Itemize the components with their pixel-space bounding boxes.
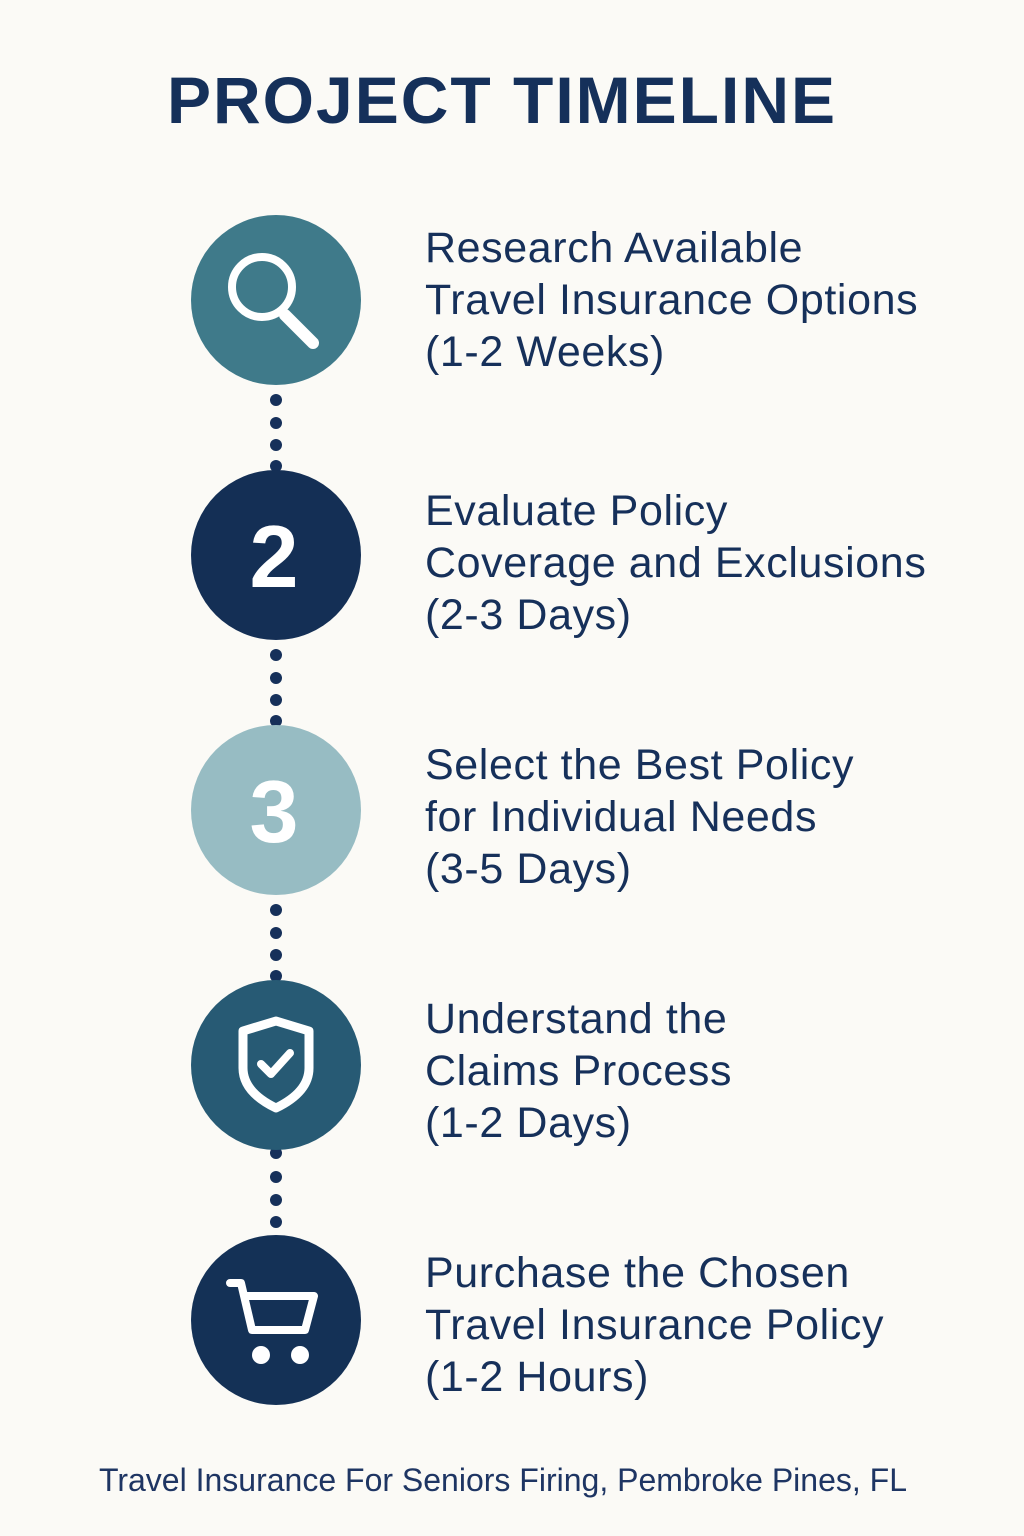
icon: number 2 circle <box>191 470 361 640</box>
step 1 text: Travel Insurance Options <box>425 276 918 324</box>
title: PROJECT TIMELINE <box>167 63 837 137</box>
icon: magnifier circle <box>191 215 361 385</box>
footer: Travel Insurance For Seniors Firing, Pembroke Pines, FL <box>99 1462 907 1498</box>
step 5 text: Travel Insurance Policy <box>425 1301 884 1349</box>
step 1 text: Research Available <box>425 224 803 272</box>
step 2 text: Coverage and Exclusions <box>425 539 926 587</box>
step 5 text <box>425 1249 884 1401</box>
step 4 text: Claims Process <box>425 1047 732 1095</box>
step 1 text: (1-2 Weeks) <box>425 328 665 376</box>
step 3 text <box>425 741 854 893</box>
icon: shield circle <box>191 980 361 1150</box>
step 5 text: (1-2 Hours) <box>425 1353 649 1401</box>
step 2 text: (2-3 Days) <box>425 591 632 639</box>
icon: cart circle <box>191 1235 361 1405</box>
step 3 text: (3-5 Days) <box>425 845 632 893</box>
step 2 text <box>425 487 926 639</box>
step 2 text: Evaluate Policy <box>425 487 728 535</box>
connector dots <box>270 394 282 1228</box>
step 4 text <box>425 995 732 1147</box>
step 4 text: Understand the <box>425 995 727 1043</box>
icon: number 2 circle: 2 <box>250 507 298 606</box>
step 3 text: Select the Best Policy <box>425 741 854 789</box>
icon: number 3 circle: 3 <box>250 762 298 861</box>
step 3 text: for Individual Needs <box>425 793 817 841</box>
step 5 text: Purchase the Chosen <box>425 1249 850 1297</box>
icon: number 3 circle <box>191 725 361 895</box>
step 1 text <box>425 224 918 376</box>
step 4 text: (1-2 Days) <box>425 1099 632 1147</box>
